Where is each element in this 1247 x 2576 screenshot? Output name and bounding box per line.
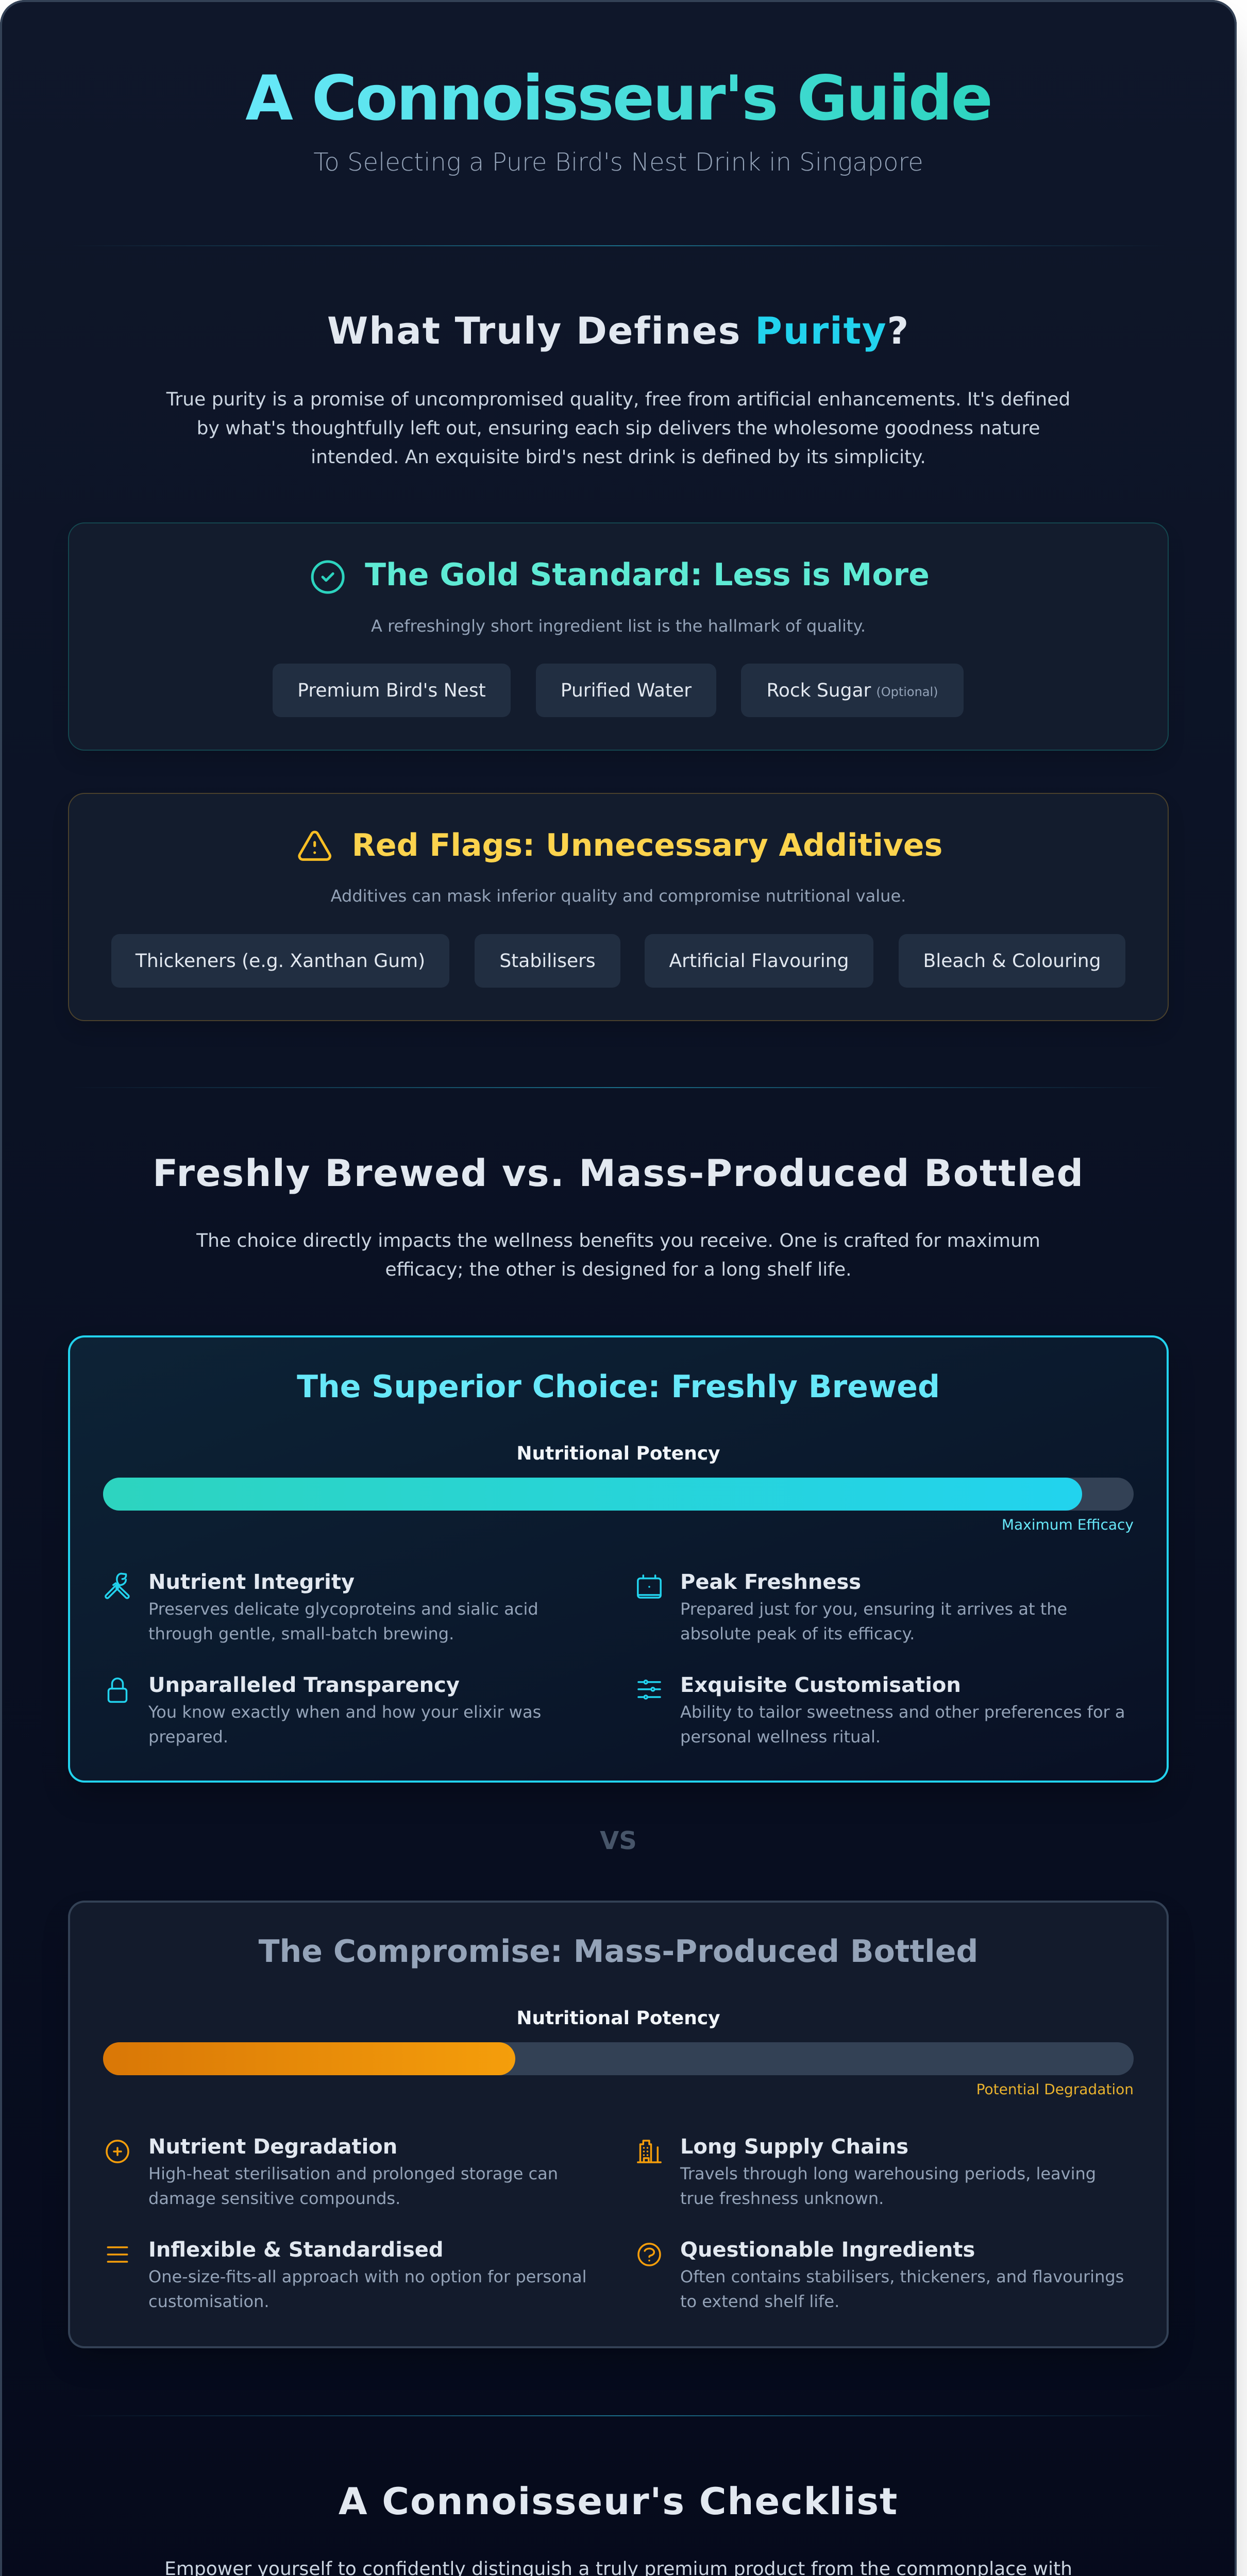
feature: nutrient degradation bbox=[106, 2135, 558, 2208]
feature: exquisite customisation: Exquisite Customisation bbox=[680, 1673, 961, 1697]
panel: gold standard bbox=[68, 522, 1169, 751]
freshly brewed title: The Superior Choice: Freshly Brewed bbox=[297, 1369, 940, 1405]
icon: menu lines bbox=[107, 2246, 128, 2263]
panel: freshly brewed bbox=[68, 1335, 1169, 1783]
feature: long supply chains: Travels through long warehousing periods, leaving bbox=[680, 2164, 1096, 2183]
vs label: VS bbox=[600, 1826, 637, 1855]
gold standard description: A refreshingly short ingredient list is the hallmark of quality. bbox=[371, 616, 866, 636]
potency label: Nutritional Potency bbox=[516, 1443, 720, 1464]
red flags description: Additives can mask inferior quality and compromise nutritional value. bbox=[331, 886, 906, 906]
feature: inflexible and standardised bbox=[107, 2238, 587, 2311]
text block: purity intro: True purity is a promise of uncompromised quality, free from artificial enhancements. It's defined bbox=[166, 389, 1070, 410]
feature: unparalleled transparency: Unparalleled Transparency bbox=[148, 1673, 460, 1697]
red flags heading: Red Flags: Unnecessary Additives bbox=[352, 827, 942, 863]
text block: purity intro: intended. An exquisite bird's nest drink is defined by its simplicity. bbox=[311, 447, 926, 468]
text block: purity intro bbox=[166, 389, 1070, 468]
icon: lock bbox=[107, 1677, 128, 1703]
feature: unparalleled transparency: You know exactly when and how your elixir was bbox=[148, 1702, 541, 1722]
bar caption: Potential Degradation bbox=[976, 2081, 1134, 2098]
feature: long supply chains: true freshness unknown. bbox=[680, 2189, 884, 2208]
feature: peak freshness: Peak Freshness bbox=[680, 1570, 861, 1594]
subtitle: To Selecting a Pure Bird's Nest Drink in Singapore bbox=[313, 148, 923, 177]
icon: building bbox=[637, 2140, 662, 2163]
feature: nutrient integrity: through gentle, small-batch brewing. bbox=[148, 1624, 454, 1643]
text block: comparison intro bbox=[196, 1230, 1040, 1280]
pill: stabilisers: Stabilisers bbox=[499, 950, 596, 972]
feature: nutrient integrity: Preserves delicate glycoproteins and sialic acid bbox=[148, 1599, 538, 1619]
feature: unparalleled transparency bbox=[107, 1673, 541, 1747]
pill: rock sugar: (Optional) bbox=[876, 685, 938, 699]
feature: peak freshness: Prepared just for you, ensuring it arrives at the bbox=[680, 1599, 1067, 1619]
pill: purified water bbox=[536, 664, 716, 717]
icon: warning triangle bbox=[298, 831, 332, 861]
potency label: Nutritional Potency bbox=[516, 2008, 720, 2029]
feature: nutrient degradation: Nutrient Degradation bbox=[148, 2135, 397, 2159]
potency bar 40% bbox=[103, 2042, 1134, 2075]
panel: red flags bbox=[68, 793, 1169, 1021]
pill: purified water: Purified Water bbox=[561, 680, 692, 701]
icon: sliders bbox=[637, 1680, 661, 1700]
feature: nutrient integrity: Nutrient Integrity bbox=[148, 1570, 355, 1594]
bar caption: Maximum Efficacy bbox=[1002, 1516, 1134, 1533]
heading: connoisseur's checklist: A Connoisseur's Checklist bbox=[339, 2480, 898, 2523]
feature: questionable ingredients: Questionable Ingredients bbox=[680, 2238, 975, 2262]
feature: long supply chains: Long Supply Chains bbox=[680, 2135, 908, 2159]
pill: artificial flavouring: Artificial Flavouring bbox=[669, 950, 849, 972]
pill: artificial flavouring bbox=[645, 934, 873, 988]
feature: questionable ingredients: to extend shelf life. bbox=[680, 2292, 839, 2311]
potency bar 95% bbox=[103, 1478, 1134, 1511]
icon: plus circle bbox=[106, 2140, 129, 2163]
pill: rock sugar bbox=[741, 664, 964, 717]
feature: nutrient integrity bbox=[105, 1570, 538, 1643]
feature: unparalleled transparency: prepared. bbox=[148, 1727, 228, 1747]
pill: bleach and colouring: Bleach & Colouring bbox=[923, 950, 1101, 972]
feature: questionable ingredients bbox=[637, 2238, 1124, 2311]
heading: freshly brewed vs mass-produced: Freshly Brewed vs. Mass-Produced Bottled bbox=[153, 1151, 1084, 1195]
title: A Connoisseur's Guide bbox=[245, 63, 991, 134]
feature: inflexible and standardised: customisation. bbox=[148, 2292, 269, 2311]
pill: rock sugar: Rock Sugar bbox=[766, 680, 871, 701]
panel: mass-produced bottled bbox=[68, 1901, 1169, 2348]
icon: tools bbox=[105, 1572, 130, 1599]
gold standard heading: The Gold Standard: Less is More bbox=[365, 557, 930, 593]
feature: peak freshness bbox=[637, 1570, 1067, 1643]
text block: purity intro: by what's thoughtfully left out, ensuring each sip delivers the wholesome goodness nature bbox=[197, 418, 1040, 439]
heading: what truly defines purity: What Truly Defines Purity? bbox=[327, 309, 909, 352]
mass-produced title: The Compromise: Mass-Produced Bottled bbox=[259, 1934, 978, 1970]
pill: bleach and colouring bbox=[899, 934, 1125, 988]
feature: inflexible and standardised: Inflexible & Standardised bbox=[148, 2238, 444, 2262]
icon: question circle bbox=[637, 2243, 661, 2266]
feature: nutrient degradation: damage sensitive compounds. bbox=[148, 2189, 400, 2208]
feature: exquisite customisation: personal wellness ritual. bbox=[680, 1727, 881, 1747]
feature: exquisite customisation: Ability to tailor sweetness and other preferences for a bbox=[680, 1702, 1125, 1722]
text block: comparison intro: efficacy; the other is designed for a long shelf life. bbox=[385, 1259, 852, 1280]
feature: long supply chains bbox=[637, 2135, 1096, 2208]
icon: calendar bbox=[637, 1574, 662, 1599]
feature: exquisite customisation bbox=[637, 1673, 1125, 1747]
pill: stabilisers bbox=[475, 934, 620, 988]
feature: inflexible and standardised: One-size-fits-all approach with no option for personal bbox=[148, 2267, 587, 2286]
pill: premium bird's nest: Premium Bird's Nest bbox=[297, 680, 486, 701]
feature: nutrient degradation: High-heat sterilisation and prolonged storage can bbox=[148, 2164, 558, 2183]
text block: comparison intro: The choice directly impacts the wellness benefits you receive. One is crafted for maximum bbox=[196, 1230, 1040, 1251]
feature: questionable ingredients: Often contains stabilisers, thickeners, and flavourings bbox=[680, 2267, 1124, 2286]
pill: thickeners: Thickeners (e.g. Xanthan Gum) bbox=[136, 950, 425, 972]
pill: thickeners bbox=[111, 934, 449, 988]
feature: peak freshness: absolute peak of its efficacy. bbox=[680, 1624, 915, 1643]
icon: check circle bbox=[311, 561, 345, 594]
pill: premium bird's nest bbox=[273, 664, 511, 717]
